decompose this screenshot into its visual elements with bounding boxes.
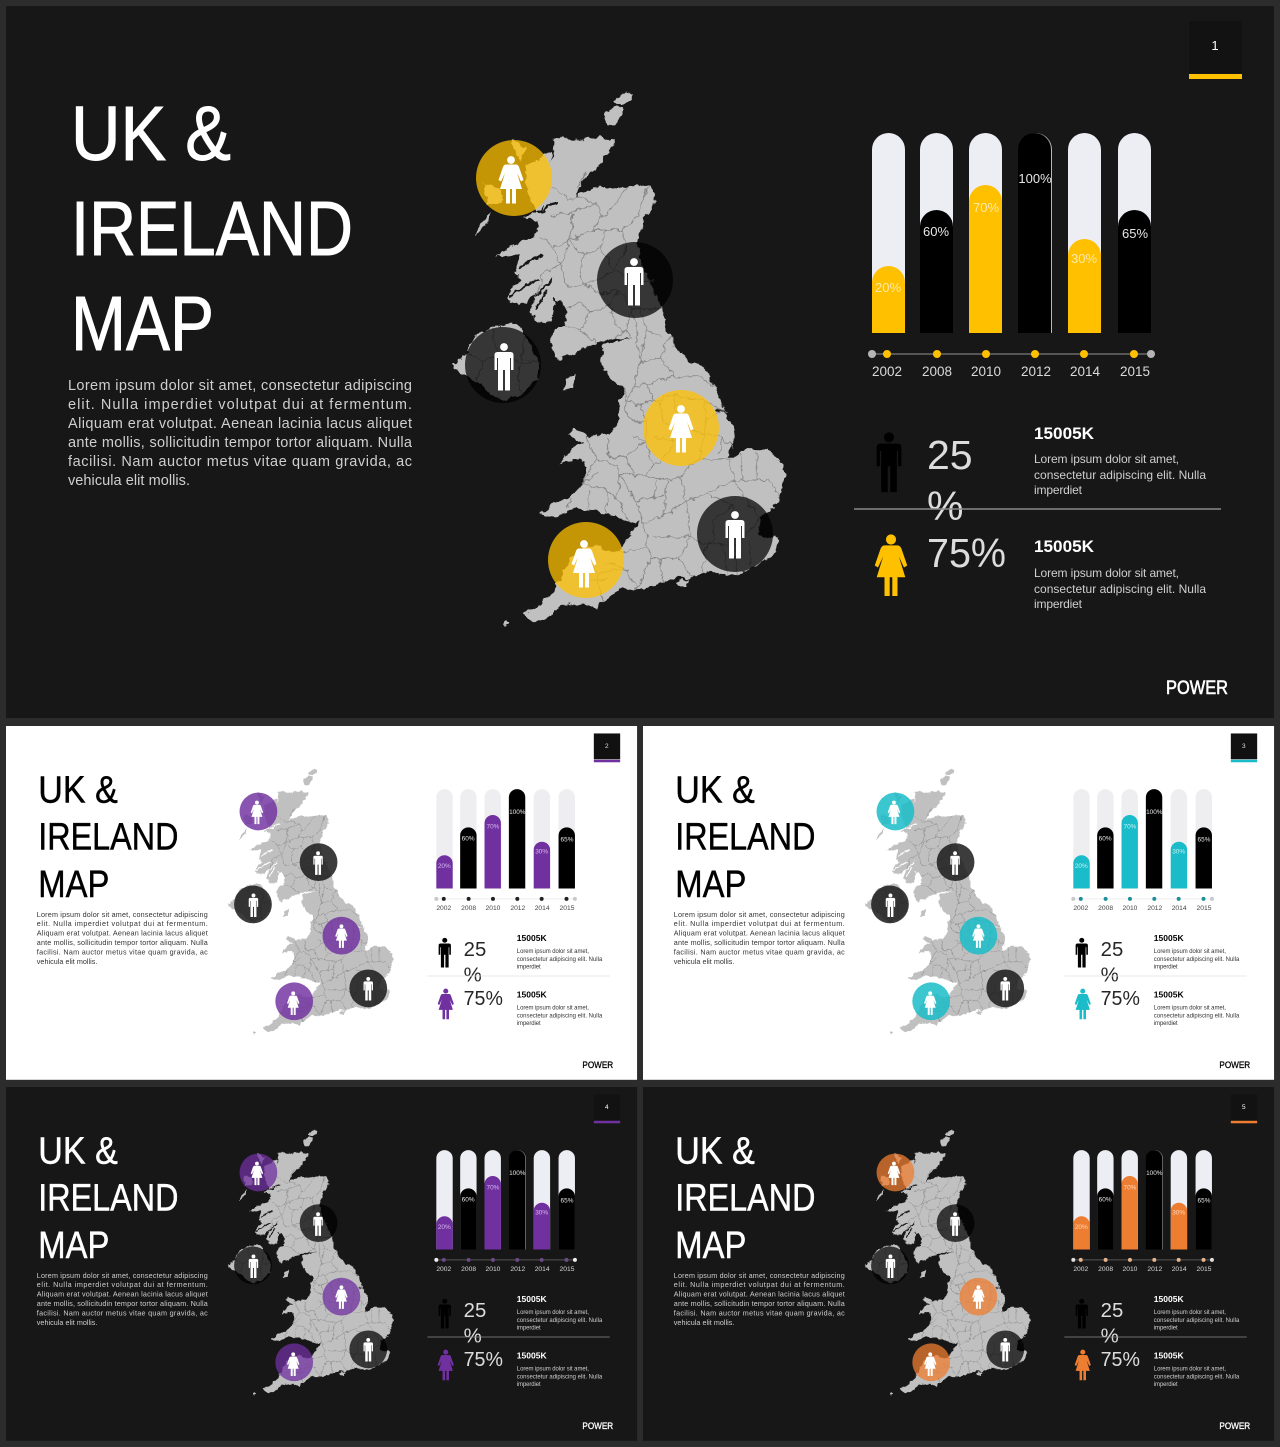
- paragraph: facilisi. Nam auctor metus vitae quam gravida, ac: [68, 454, 412, 470]
- paragraph: [37, 910, 208, 966]
- bar chart: 20%: [1075, 863, 1088, 870]
- timeline: 2002: [436, 1266, 451, 1273]
- paragraph: vehicula elit mollis.: [68, 473, 190, 489]
- bar chart: 65%: [1122, 226, 1148, 241]
- paragraph: vehicula elit mollis.: [674, 957, 734, 966]
- paragraph: ante mollis, sollicitudin tempor tortor aliquam. Nulla: [68, 435, 413, 451]
- female statistic: [438, 1349, 603, 1388]
- female statistic: Lorem ipsum dolor sit amet,: [1034, 566, 1179, 580]
- bar chart: 100%: [1146, 809, 1163, 816]
- title: IRELAND: [675, 816, 815, 859]
- male statistic: 15005K: [517, 1294, 548, 1304]
- bar chart: 70%: [1124, 1184, 1137, 1191]
- paragraph: Lorem ipsum dolor sit amet, consectetur adipiscing: [37, 1271, 208, 1280]
- bar chart: 65%: [561, 1197, 574, 1204]
- panel: slide 4 dark purple: [6, 1087, 637, 1441]
- paragraph: Aliquam erat volutpat. Aenean lacinia lacus aliquet: [68, 416, 412, 432]
- female statistic: imperdiet: [517, 1021, 541, 1027]
- slide background: [6, 726, 637, 1080]
- title: IRELAND: [38, 1177, 178, 1220]
- title: IRELAND: [71, 186, 353, 272]
- slide background: [643, 1087, 1274, 1441]
- female statistic: imperdiet: [1154, 1021, 1178, 1027]
- bar chart: [1073, 1150, 1212, 1249]
- paragraph: Aliquam erat volutpat. Aenean lacinia lacus aliquet: [37, 929, 208, 938]
- male statistic: Lorem ipsum dolor sit amet,: [1154, 1310, 1226, 1316]
- male statistic: %: [464, 964, 482, 986]
- bar chart: 60%: [1099, 1196, 1112, 1203]
- title: MAP: [71, 281, 214, 367]
- male statistic: imperdiet: [1034, 483, 1083, 497]
- bar chart: 65%: [1198, 836, 1211, 843]
- bar chart: 60%: [462, 835, 475, 842]
- male statistic: 15005K: [1154, 1294, 1185, 1304]
- male statistic: [877, 424, 1206, 529]
- timeline: 2015: [1197, 905, 1212, 912]
- map markers: [234, 1154, 387, 1381]
- timeline: 2002: [872, 364, 902, 379]
- page badge: [1231, 733, 1257, 762]
- male statistic: [1076, 1294, 1240, 1347]
- paragraph: Aliquam erat volutpat. Aenean lacinia lacus aliquet: [674, 929, 845, 938]
- male statistic: 25: [464, 1300, 486, 1322]
- female statistic: [1075, 988, 1240, 1027]
- bar chart: 20%: [1075, 1224, 1088, 1231]
- bar chart: [872, 133, 1151, 333]
- timeline: 2010: [1123, 905, 1138, 912]
- slide background: [6, 6, 1274, 718]
- male statistic: Lorem ipsum dolor sit amet,: [517, 949, 589, 955]
- female statistic: 15005K: [1034, 537, 1095, 556]
- paragraph: [674, 910, 845, 966]
- title: UK &: [675, 1130, 755, 1173]
- bar chart: 100%: [509, 1170, 526, 1177]
- male statistic: consectetur adipiscing elit. Nulla: [517, 1318, 603, 1324]
- map markers: [871, 793, 1024, 1020]
- female statistic: consectetur adipiscing elit. Nulla: [1154, 1014, 1240, 1020]
- page badge: [594, 733, 620, 762]
- bar chart: 60%: [462, 1196, 475, 1203]
- timeline: 2015: [560, 905, 575, 912]
- bar chart: 100%: [1146, 1170, 1163, 1177]
- slide background: [643, 726, 1274, 1080]
- male statistic: 25: [1101, 939, 1123, 961]
- page badge: [594, 1094, 620, 1123]
- bar chart: 100%: [509, 809, 526, 816]
- bar chart: [436, 1150, 575, 1249]
- title: [675, 1130, 815, 1267]
- female statistic: [875, 530, 1206, 611]
- bar chart: 70%: [1124, 823, 1137, 830]
- page badge: 2: [605, 743, 609, 750]
- bar chart: 60%: [1099, 835, 1112, 842]
- paragraph: Lorem ipsum dolor sit amet, consectetur adipiscing: [68, 378, 412, 394]
- divider: [1064, 975, 1247, 977]
- timeline: 2015: [1197, 1266, 1212, 1273]
- paragraph: elit. Nulla imperdiet volutpat dui at fermentum.: [37, 919, 208, 928]
- title: MAP: [675, 863, 746, 906]
- male statistic: imperdiet: [517, 1325, 541, 1331]
- map of UK and Ireland: [865, 769, 1030, 1034]
- title: MAP: [38, 1224, 109, 1267]
- map markers: [871, 1154, 1024, 1381]
- female statistic: [1075, 1349, 1240, 1388]
- title: [675, 769, 815, 906]
- female statistic: 15005K: [1154, 989, 1185, 999]
- page badge: 3: [1242, 743, 1246, 750]
- male statistic: %: [1101, 1325, 1119, 1347]
- title: MAP: [38, 863, 109, 906]
- female statistic: 75%: [927, 530, 1006, 576]
- timeline: 2008: [461, 905, 476, 912]
- paragraph: facilisi. Nam auctor metus vitae quam gravida, ac: [37, 1309, 208, 1318]
- bar chart: 60%: [923, 224, 949, 239]
- female statistic: consectetur adipiscing elit. Nulla: [1034, 582, 1206, 596]
- panel: slide 1 large dark yellow: [6, 6, 1274, 718]
- logo: POWER: [1166, 678, 1228, 699]
- male statistic: Lorem ipsum dolor sit amet,: [1034, 452, 1179, 466]
- bar chart: 65%: [1198, 1197, 1211, 1204]
- female statistic: consectetur adipiscing elit. Nulla: [517, 1375, 603, 1381]
- male statistic: 15005K: [517, 933, 548, 943]
- paragraph: Aliquam erat volutpat. Aenean lacinia lacus aliquet: [37, 1290, 208, 1299]
- timeline: 2008: [461, 1266, 476, 1273]
- male statistic: 15005K: [1034, 424, 1095, 443]
- timeline: 2002: [1073, 1266, 1088, 1273]
- paragraph: ante mollis, sollicitudin tempor tortor aliquam. Nulla: [674, 938, 845, 947]
- page badge: [1231, 1094, 1257, 1123]
- timeline: 2012: [510, 905, 526, 912]
- logo: POWER: [1219, 1421, 1250, 1432]
- panel: slide 2 white purple: [6, 726, 637, 1080]
- bar chart: 20%: [875, 280, 901, 295]
- title: UK &: [675, 769, 755, 812]
- page badge: 5: [1242, 1104, 1246, 1111]
- bar chart: 20%: [438, 863, 451, 870]
- title: MAP: [675, 1224, 746, 1267]
- paragraph: elit. Nulla imperdiet volutpat dui at fermentum.: [674, 1280, 845, 1289]
- female statistic: imperdiet: [1034, 597, 1083, 611]
- female statistic: imperdiet: [517, 1382, 541, 1388]
- female statistic: Lorem ipsum dolor sit amet,: [1154, 1367, 1226, 1373]
- page badge: 4: [605, 1104, 609, 1111]
- male statistic: [1076, 933, 1240, 986]
- paragraph: [68, 378, 413, 489]
- timeline: 2014: [535, 905, 550, 912]
- female statistic: 15005K: [517, 1350, 548, 1360]
- female statistic: 75%: [1101, 988, 1140, 1010]
- male statistic: 25: [927, 432, 973, 478]
- timeline: 2010: [971, 364, 1001, 379]
- paragraph: elit. Nulla imperdiet volutpat dui at fermentum.: [68, 397, 412, 413]
- map markers: [465, 140, 773, 598]
- bar chart: 30%: [535, 849, 548, 856]
- paragraph: ante mollis, sollicitudin tempor tortor aliquam. Nulla: [37, 938, 208, 947]
- paragraph: facilisi. Nam auctor metus vitae quam gravida, ac: [37, 948, 208, 957]
- bar chart: [436, 789, 575, 888]
- timeline: [1071, 897, 1214, 912]
- map of UK and Ireland: [228, 769, 393, 1034]
- bar chart: 30%: [1172, 1210, 1185, 1217]
- page badge: [1189, 21, 1242, 79]
- male statistic: imperdiet: [1154, 964, 1178, 970]
- bar chart: [1073, 789, 1212, 888]
- female statistic: [438, 988, 603, 1027]
- paragraph: [37, 1271, 208, 1327]
- male statistic: %: [927, 483, 963, 529]
- bar chart: 70%: [487, 823, 500, 830]
- timeline: 2012: [1147, 1266, 1163, 1273]
- paragraph: vehicula elit mollis.: [674, 1318, 734, 1327]
- female statistic: Lorem ipsum dolor sit amet,: [1154, 1006, 1226, 1012]
- timeline: 2012: [1021, 364, 1051, 379]
- female statistic: 75%: [464, 988, 503, 1010]
- timeline: 2002: [436, 905, 451, 912]
- male statistic: 25: [464, 939, 486, 961]
- divider: [1064, 1336, 1247, 1338]
- paragraph: vehicula elit mollis.: [37, 1318, 97, 1327]
- panel: slide 3 white teal: [643, 726, 1274, 1080]
- title: [71, 91, 353, 367]
- map markers: [234, 793, 387, 1020]
- timeline: 2008: [1098, 1266, 1113, 1273]
- title: UK &: [38, 769, 118, 812]
- timeline: 2012: [510, 1266, 526, 1273]
- paragraph: facilisi. Nam auctor metus vitae quam gravida, ac: [674, 948, 845, 957]
- bar chart: 70%: [487, 1184, 500, 1191]
- female statistic: imperdiet: [1154, 1382, 1178, 1388]
- title: UK &: [38, 1130, 118, 1173]
- timeline: 2014: [1172, 905, 1187, 912]
- bar chart: 65%: [561, 836, 574, 843]
- male statistic: consectetur adipiscing elit. Nulla: [1154, 1318, 1240, 1324]
- map of UK and Ireland: [453, 92, 785, 627]
- bar chart: 70%: [973, 200, 999, 215]
- paragraph: vehicula elit mollis.: [37, 957, 97, 966]
- female statistic: 15005K: [517, 989, 548, 999]
- title: IRELAND: [38, 816, 178, 859]
- slide background: [6, 1087, 637, 1441]
- female statistic: 15005K: [1154, 1350, 1185, 1360]
- male statistic: 25: [1101, 1300, 1123, 1322]
- female statistic: consectetur adipiscing elit. Nulla: [517, 1014, 603, 1020]
- male statistic: consectetur adipiscing elit. Nulla: [1034, 468, 1206, 482]
- female statistic: 75%: [464, 1349, 503, 1371]
- bar chart: 30%: [1172, 849, 1185, 856]
- male statistic: Lorem ipsum dolor sit amet,: [517, 1310, 589, 1316]
- page badge: 1: [1211, 38, 1219, 53]
- timeline: 2014: [1172, 1266, 1187, 1273]
- paragraph: elit. Nulla imperdiet volutpat dui at fermentum.: [674, 919, 845, 928]
- title: UK &: [71, 91, 231, 177]
- title: IRELAND: [675, 1177, 815, 1220]
- bar chart: 30%: [535, 1210, 548, 1217]
- paragraph: Aliquam erat volutpat. Aenean lacinia lacus aliquet: [674, 1290, 845, 1299]
- timeline: 2002: [1073, 905, 1088, 912]
- bar chart: 100%: [1018, 171, 1052, 186]
- female statistic: Lorem ipsum dolor sit amet,: [517, 1006, 589, 1012]
- male statistic: 15005K: [1154, 933, 1185, 943]
- title: [38, 1130, 178, 1267]
- timeline: [1071, 1258, 1214, 1273]
- timeline: 2008: [922, 364, 952, 379]
- timeline: 2010: [486, 905, 501, 912]
- title: [38, 769, 178, 906]
- male statistic: consectetur adipiscing elit. Nulla: [1154, 957, 1240, 963]
- timeline: 2014: [535, 1266, 550, 1273]
- timeline: 2015: [560, 1266, 575, 1273]
- timeline: [434, 897, 577, 912]
- female statistic: 75%: [1101, 1349, 1140, 1371]
- logo: POWER: [582, 1421, 613, 1432]
- timeline: 2008: [1098, 905, 1113, 912]
- bar chart: 30%: [1071, 251, 1097, 266]
- paragraph: [674, 1271, 845, 1327]
- map of UK and Ireland: [865, 1130, 1030, 1395]
- logo: POWER: [582, 1060, 613, 1071]
- panel: slide 5 dark orange: [643, 1087, 1274, 1441]
- timeline: 2012: [1147, 905, 1163, 912]
- timeline: 2014: [1070, 364, 1101, 379]
- male statistic: %: [464, 1325, 482, 1347]
- timeline: 2010: [1123, 1266, 1138, 1273]
- male statistic: [439, 1294, 603, 1347]
- timeline: 2015: [1120, 364, 1150, 379]
- timeline: [434, 1258, 577, 1273]
- male statistic: imperdiet: [1154, 1325, 1178, 1331]
- male statistic: consectetur adipiscing elit. Nulla: [517, 957, 603, 963]
- male statistic: imperdiet: [517, 964, 541, 970]
- female statistic: Lorem ipsum dolor sit amet,: [517, 1367, 589, 1373]
- paragraph: ante mollis, sollicitudin tempor tortor aliquam. Nulla: [674, 1299, 845, 1308]
- timeline: 2010: [486, 1266, 501, 1273]
- divider: [854, 508, 1221, 510]
- paragraph: Lorem ipsum dolor sit amet, consectetur adipiscing: [674, 1271, 845, 1280]
- paragraph: Lorem ipsum dolor sit amet, consectetur adipiscing: [37, 910, 208, 919]
- paragraph: ante mollis, sollicitudin tempor tortor aliquam. Nulla: [37, 1299, 208, 1308]
- logo: POWER: [1219, 1060, 1250, 1071]
- divider: [427, 975, 610, 977]
- timeline: [868, 350, 1155, 379]
- male statistic: Lorem ipsum dolor sit amet,: [1154, 949, 1226, 955]
- paragraph: Lorem ipsum dolor sit amet, consectetur adipiscing: [674, 910, 845, 919]
- female statistic: consectetur adipiscing elit. Nulla: [1154, 1375, 1240, 1381]
- map of UK and Ireland: [228, 1130, 393, 1395]
- paragraph: elit. Nulla imperdiet volutpat dui at fermentum.: [37, 1280, 208, 1289]
- male statistic: %: [1101, 964, 1119, 986]
- bar chart: 20%: [438, 1224, 451, 1231]
- paragraph: facilisi. Nam auctor metus vitae quam gravida, ac: [674, 1309, 845, 1318]
- male statistic: [439, 933, 603, 986]
- divider: [427, 1336, 610, 1338]
